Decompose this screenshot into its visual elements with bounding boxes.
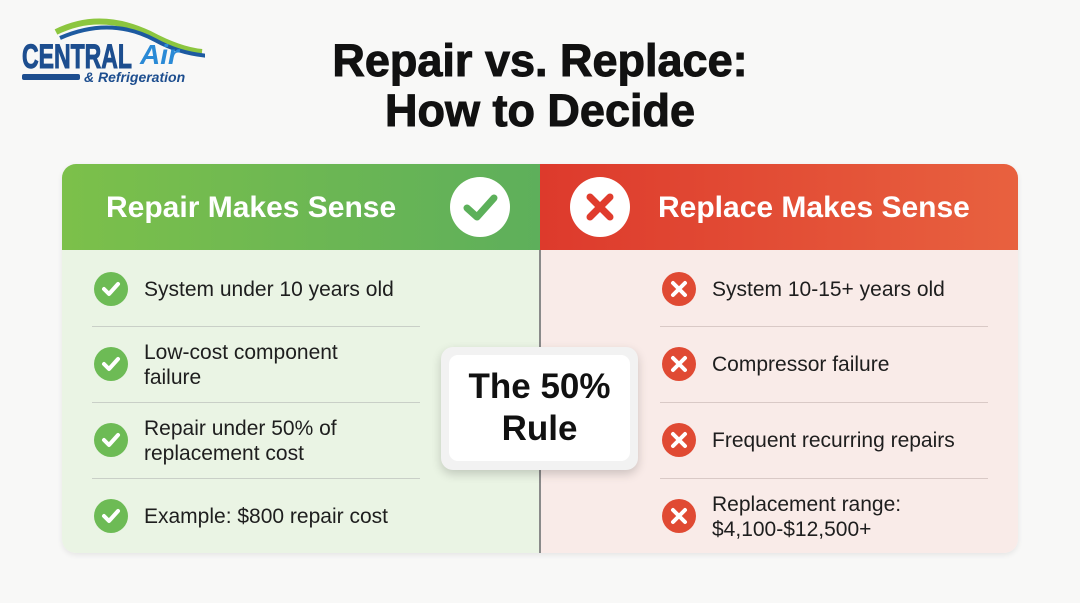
logo: CENTRAL: [22, 38, 132, 76]
repair items: failure: [144, 366, 201, 389]
callout: 50% rule: Rule: [502, 409, 577, 448]
repair items: System under 10 years old: [144, 278, 394, 301]
logo: & Refrigeration: [84, 69, 185, 85]
replace items: Frequent recurring repairs: [712, 429, 955, 452]
title: [332, 35, 748, 136]
callout: 50% rule: The 50%: [468, 367, 610, 406]
title: How to Decide: [385, 85, 695, 136]
replace items: System 10-15+ years old: [712, 278, 945, 301]
logo: [22, 18, 205, 85]
repair items: Example: $800 repair cost: [144, 505, 388, 528]
replace items: $4,100-$12,500+: [712, 518, 871, 541]
repair items: replacement cost: [144, 442, 304, 465]
repair items: Repair under 50% of: [144, 417, 337, 440]
replace items: [660, 272, 988, 541]
replace items: Compressor failure: [712, 353, 889, 376]
callout: 50% rule: [441, 347, 638, 470]
repair items: [92, 272, 420, 533]
repair items: Low-cost component: [144, 341, 338, 364]
replace header: Replace Makes Sense: [658, 191, 970, 224]
panel: replace: [540, 164, 1018, 553]
repair header: Repair Makes Sense: [106, 191, 396, 224]
replace header: [540, 164, 1018, 250]
panel: comparison: [62, 164, 1018, 553]
replace items: Replacement range:: [712, 493, 901, 516]
title: Repair vs. Replace:: [332, 35, 748, 86]
panel: repair: [62, 164, 540, 553]
repair header: [62, 164, 540, 250]
logo: Air: [139, 39, 181, 70]
